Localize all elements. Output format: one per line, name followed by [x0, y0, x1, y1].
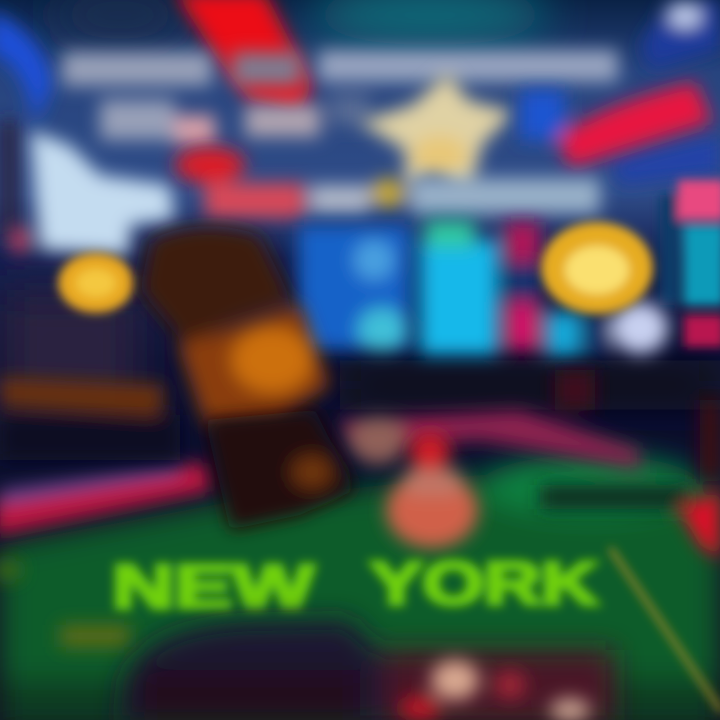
bottom highlights [400, 660, 590, 720]
blue and red banner [520, 82, 712, 168]
gold seal right [541, 222, 653, 314]
blue chart panels [298, 220, 668, 356]
bottom crowd [120, 620, 615, 720]
heading text blocks [62, 50, 618, 145]
white panel left [10, 130, 175, 255]
word two: YORK [370, 550, 598, 617]
gold line [610, 548, 720, 712]
word one: NEW [112, 553, 315, 622]
right side panel [660, 180, 720, 347]
gavel head [140, 226, 330, 425]
lower left gold smudge [0, 560, 130, 647]
pink band and floor [0, 370, 720, 720]
gavel sounding block [0, 378, 180, 460]
blue swirl top left [0, 10, 52, 240]
gold seal left [58, 253, 134, 313]
red text row [175, 147, 600, 218]
gold star [358, 72, 515, 195]
gavel [0, 226, 355, 530]
top right blue panel [610, 0, 720, 185]
green headline [112, 550, 598, 622]
gavel handle [205, 410, 355, 530]
left red band [0, 462, 212, 535]
red diagonal ribbon [175, 0, 312, 112]
salmon figure [386, 432, 478, 548]
